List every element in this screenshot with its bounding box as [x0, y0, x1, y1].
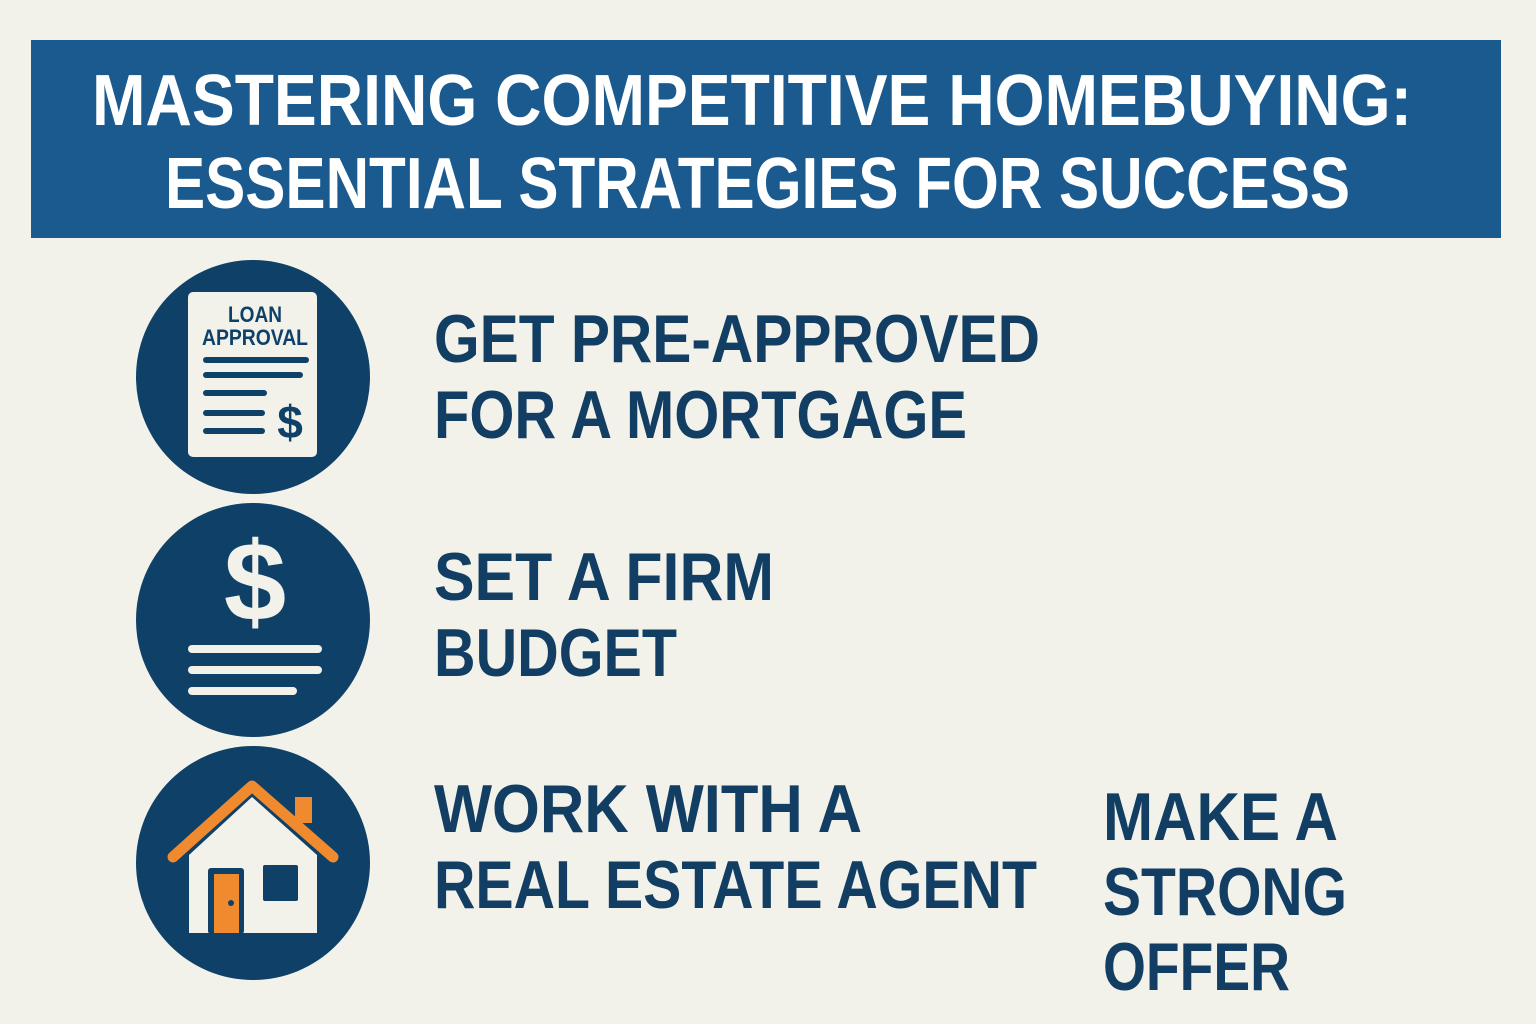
icon: loan approval document: $ [277, 396, 303, 448]
text: strong offer: MAKE A [1103, 779, 1338, 855]
icon: budget dollar: $ [224, 519, 286, 644]
title banner: MASTERING COMPETITIVE HOMEBUYING: [92, 61, 1412, 141]
icon: loan approval document: APPROVAL [202, 325, 308, 350]
icon: loan approval document [136, 260, 370, 494]
title banner [31, 40, 1501, 238]
text: agent [434, 771, 1037, 923]
text: strong offer [1103, 779, 1347, 1005]
text: strong offer: OFFER [1103, 929, 1290, 1005]
text: pre-approved [434, 301, 1040, 453]
text: pre-approved: GET PRE-APPROVED [434, 301, 1040, 377]
icon: loan approval document: LOAN [228, 302, 282, 327]
text: budget: BUDGET [434, 615, 677, 691]
text: pre-approved: FOR A MORTGAGE [434, 377, 967, 453]
text: budget: SET A FIRM [434, 539, 774, 615]
icon: house [136, 746, 370, 980]
text: agent: REAL ESTATE AGENT [434, 847, 1037, 923]
text: budget [434, 539, 774, 691]
text: agent: WORK WITH A [434, 771, 862, 847]
icon: budget dollar [136, 503, 370, 737]
text: strong offer: STRONG [1103, 854, 1347, 930]
